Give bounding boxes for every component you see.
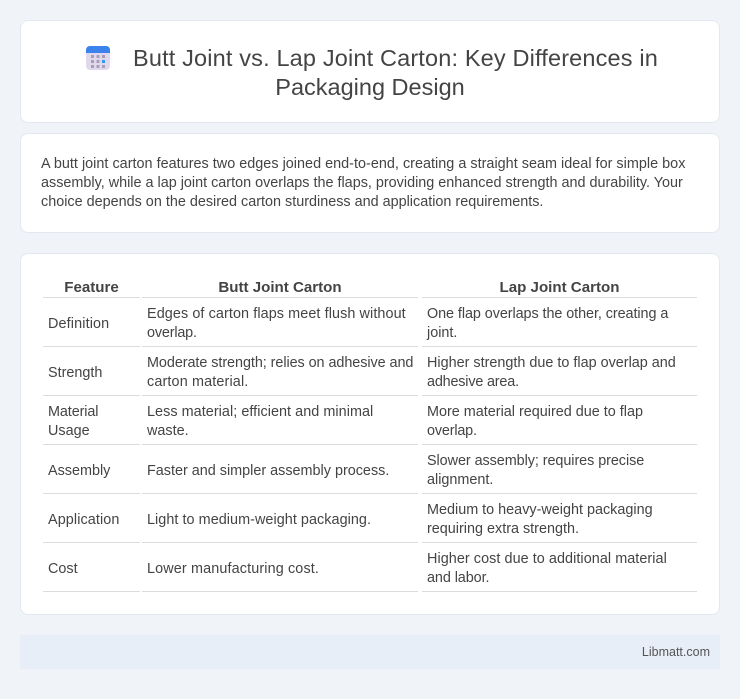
title: [133, 45, 658, 100]
row: application: [48, 502, 653, 537]
row: strength: adhesive area.: [427, 374, 519, 390]
row: cost: Higher cost due to additional material: [427, 551, 667, 567]
intro paragraph: assembly, while a lap joint carton overlaps the flaps, providing enhanced strength and durability. Your: [41, 175, 683, 191]
row: strength: Higher strength due to flap overlap and: [427, 355, 676, 371]
row: application: requiring extra strength.: [427, 521, 579, 537]
panel: header: [20, 20, 720, 123]
row: material usage: Usage: [48, 423, 90, 439]
title: Packaging Design: [275, 74, 465, 100]
row: cost: Lower manufacturing cost.: [147, 561, 319, 577]
row: assembly: Assembly: [48, 463, 110, 479]
row: assembly: [48, 453, 644, 488]
row: definition: Edges of carton flaps meet flush without: [147, 306, 406, 322]
row: assembly: Slower assembly; requires precise: [427, 453, 644, 469]
row: strength: carton material.: [147, 374, 248, 390]
intro paragraph: A butt joint carton features two edges joined end-to-end, creating a straight seam ideal for simple box: [41, 156, 685, 172]
row: material usage: Material: [48, 404, 98, 420]
footer: [20, 635, 720, 669]
row: strength: Moderate strength; relies on adhesive and: [147, 355, 413, 371]
row: application: Medium to heavy-weight packaging: [427, 502, 653, 518]
row: definition: One flap overlaps the other, creating a: [427, 306, 668, 322]
intro paragraph: [41, 156, 686, 210]
table header: Lap Joint Carton: [500, 279, 619, 296]
row: material usage: waste.: [147, 423, 189, 439]
row: cost: and labor.: [427, 570, 489, 586]
row: definition: joint.: [427, 325, 457, 341]
table header: [64, 279, 619, 296]
row: definition: Definition: [48, 316, 109, 332]
row: cost: [48, 551, 667, 586]
panel: intro text: [20, 133, 720, 233]
row: cost: Cost: [48, 561, 78, 577]
row: application: Light to medium-weight packaging.: [147, 512, 371, 528]
icon: calendar: [86, 46, 110, 70]
table header: Feature: [64, 279, 119, 296]
row: application: Application: [48, 512, 120, 528]
row: material usage: [48, 404, 643, 439]
table header: Butt Joint Carton: [218, 279, 342, 296]
row: strength: Strength: [48, 365, 102, 381]
row: assembly: Faster and simpler assembly process.: [147, 463, 389, 479]
footer credit: Libmatt.com: [642, 645, 710, 659]
row: material usage: overlap.: [427, 423, 477, 439]
row: strength: [48, 355, 676, 390]
title: Butt Joint vs. Lap Joint Carton: Key Differences in: [133, 45, 658, 71]
row: definition: [48, 306, 668, 341]
row: material usage: More material required due to flap: [427, 404, 643, 420]
panel: comparison table: [20, 253, 720, 615]
row: assembly: alignment.: [427, 472, 493, 488]
intro paragraph: choice depends on the desired carton sturdiness and application requirements.: [41, 194, 543, 210]
row: material usage: Less material; efficient and minimal: [147, 404, 373, 420]
row: definition: overlap.: [147, 325, 197, 341]
